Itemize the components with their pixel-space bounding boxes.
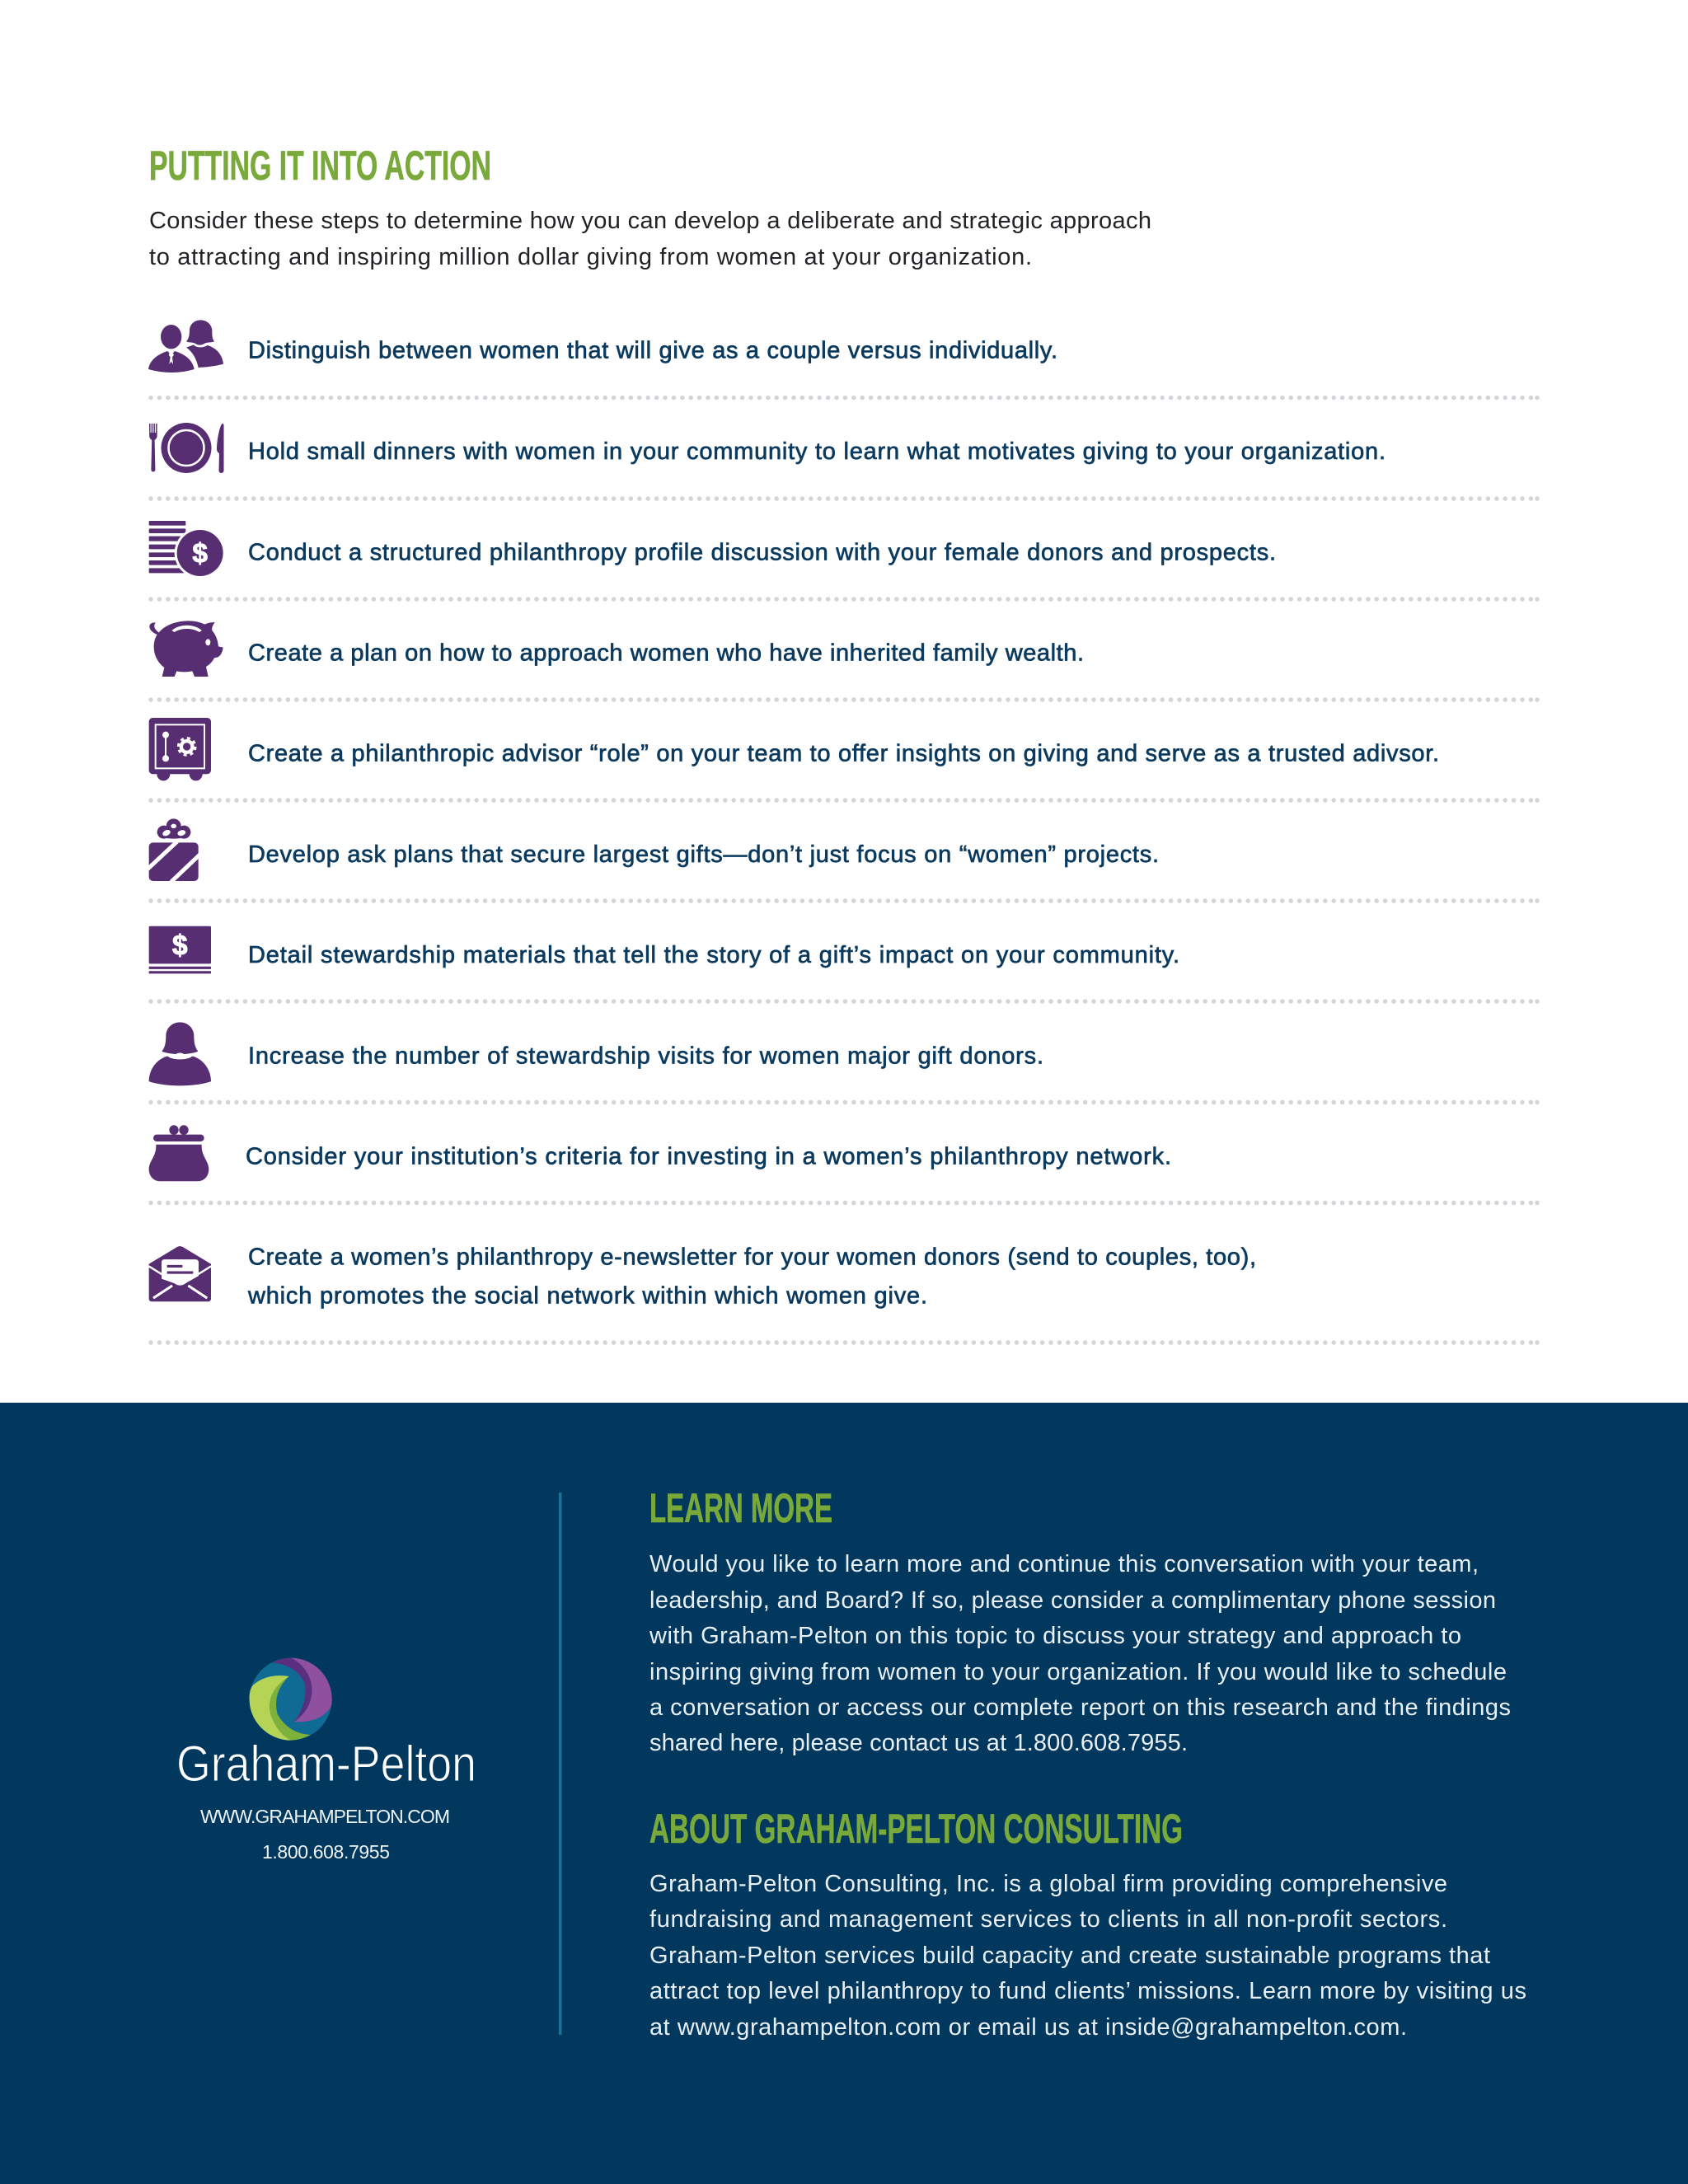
- about text block: Graham-Pelton services build capacity and create sustainable programs that: [649, 1943, 1490, 1969]
- icon: woman: [149, 1022, 211, 1085]
- step 9: [149, 1125, 1171, 1181]
- learn more text block: with Graham-Pelton on this topic to discuss your strategy and approach to: [649, 1623, 1461, 1649]
- icon: banknote: [149, 926, 211, 973]
- text: Create a plan on how to approach women who have inherited family wealth.: [248, 640, 1084, 666]
- heading: about graham-pelton consulting: ABOUT GRAHAM-PELTON CONSULTING: [649, 1806, 1183, 1852]
- text: Create a women’s philanthropy e-newsletter for your women donors (send to couples, too),: [248, 1244, 1256, 1271]
- learn more text block: Would you like to learn more and continue this conversation with your team,: [649, 1551, 1479, 1577]
- action steps list: [148, 320, 1439, 1309]
- text: Consider your institution’s criteria for investing in a women’s philanthropy network.: [246, 1144, 1171, 1170]
- logo wordmark: Graham-Pelton: [176, 1736, 476, 1792]
- icon: coin stack: [149, 521, 226, 579]
- website: WWW.GRAHAMPELTON.COM: [200, 1806, 450, 1827]
- intro paragraph: to attracting and inspiring million dollar giving from women at your organization.: [149, 244, 1032, 270]
- intro paragraph: [149, 208, 1151, 270]
- phone: 1.800.608.7955: [262, 1841, 390, 1863]
- step 6: [148, 818, 1159, 882]
- about text block: attract top level philanthropy to fund clients’ missions. Learn more by visiting us: [649, 1978, 1526, 2004]
- text: Hold small dinners with women in your community to learn what motivates giving to your organization.: [248, 438, 1386, 465]
- step 7: [149, 926, 1179, 973]
- icon: open envelope: [149, 1246, 211, 1301]
- icon: couple: [148, 320, 223, 373]
- heading: learn more: LEARN MORE: [649, 1485, 832, 1531]
- text: Conduct a structured philanthropy profile discussion with your female donors and prospects.: [248, 539, 1276, 565]
- logo mark: [249, 1658, 332, 1741]
- icon: plate and cutlery: [149, 423, 224, 473]
- about text block: Graham-Pelton Consulting, Inc. is a global firm providing comprehensive: [649, 1871, 1447, 1897]
- heading: putting it into action: PUTTING IT INTO ACTION: [149, 143, 491, 189]
- icon: coin purse: [149, 1125, 209, 1181]
- text: Create a philanthropic advisor “role” on your team to offer insights on giving and serve as a trusted adivsor.: [248, 740, 1439, 766]
- text: Develop ask plans that secure largest gifts—don’t just focus on “women” projects.: [248, 841, 1159, 868]
- learn more text block: a conversation or access our complete report on this research and the findings: [649, 1694, 1511, 1721]
- text: Increase the number of stewardship visits for women major gift donors.: [248, 1043, 1043, 1070]
- text: which promotes the social network within which women give.: [247, 1282, 927, 1309]
- about text block: at www.grahampelton.com or email us at inside@grahampelton.com.: [649, 2014, 1407, 2041]
- step 10: [149, 1244, 1256, 1309]
- learn more text block: leadership, and Board? If so, please consider a complimentary phone session: [649, 1587, 1496, 1614]
- step 2: [149, 423, 1386, 473]
- text: Distinguish between women that will give as a couple versus individually.: [248, 338, 1057, 364]
- text: Detail stewardship materials that tell the story of a gift’s impact on your community.: [248, 942, 1179, 968]
- step 8: [149, 1022, 1043, 1085]
- icon: safe: [149, 718, 211, 780]
- icon: piggy bank: [149, 621, 223, 677]
- icon: gift box: [148, 818, 200, 882]
- about text block: [649, 1871, 1526, 2041]
- intro paragraph: Consider these steps to determine how you can develop a deliberate and strategic approach: [149, 208, 1151, 234]
- icon: banknote: $: [172, 930, 188, 961]
- step 3: [149, 521, 1276, 579]
- text: [247, 1244, 1256, 1309]
- icon: coin stack: $: [192, 538, 208, 569]
- learn more text block: [649, 1551, 1511, 1756]
- about text block: fundraising and management services to clients in all non-profit sectors.: [649, 1906, 1447, 1933]
- logo: [176, 1658, 476, 1863]
- step 4: [149, 621, 1084, 677]
- step 5: [149, 718, 1439, 780]
- learn more text block: inspiring giving from women to your organization. If you would like to schedule: [649, 1659, 1507, 1685]
- footer band: [0, 1403, 1688, 2184]
- learn more text block: shared here, please contact us at 1.800.608.7955.: [649, 1730, 1188, 1756]
- step 1: [148, 320, 1057, 373]
